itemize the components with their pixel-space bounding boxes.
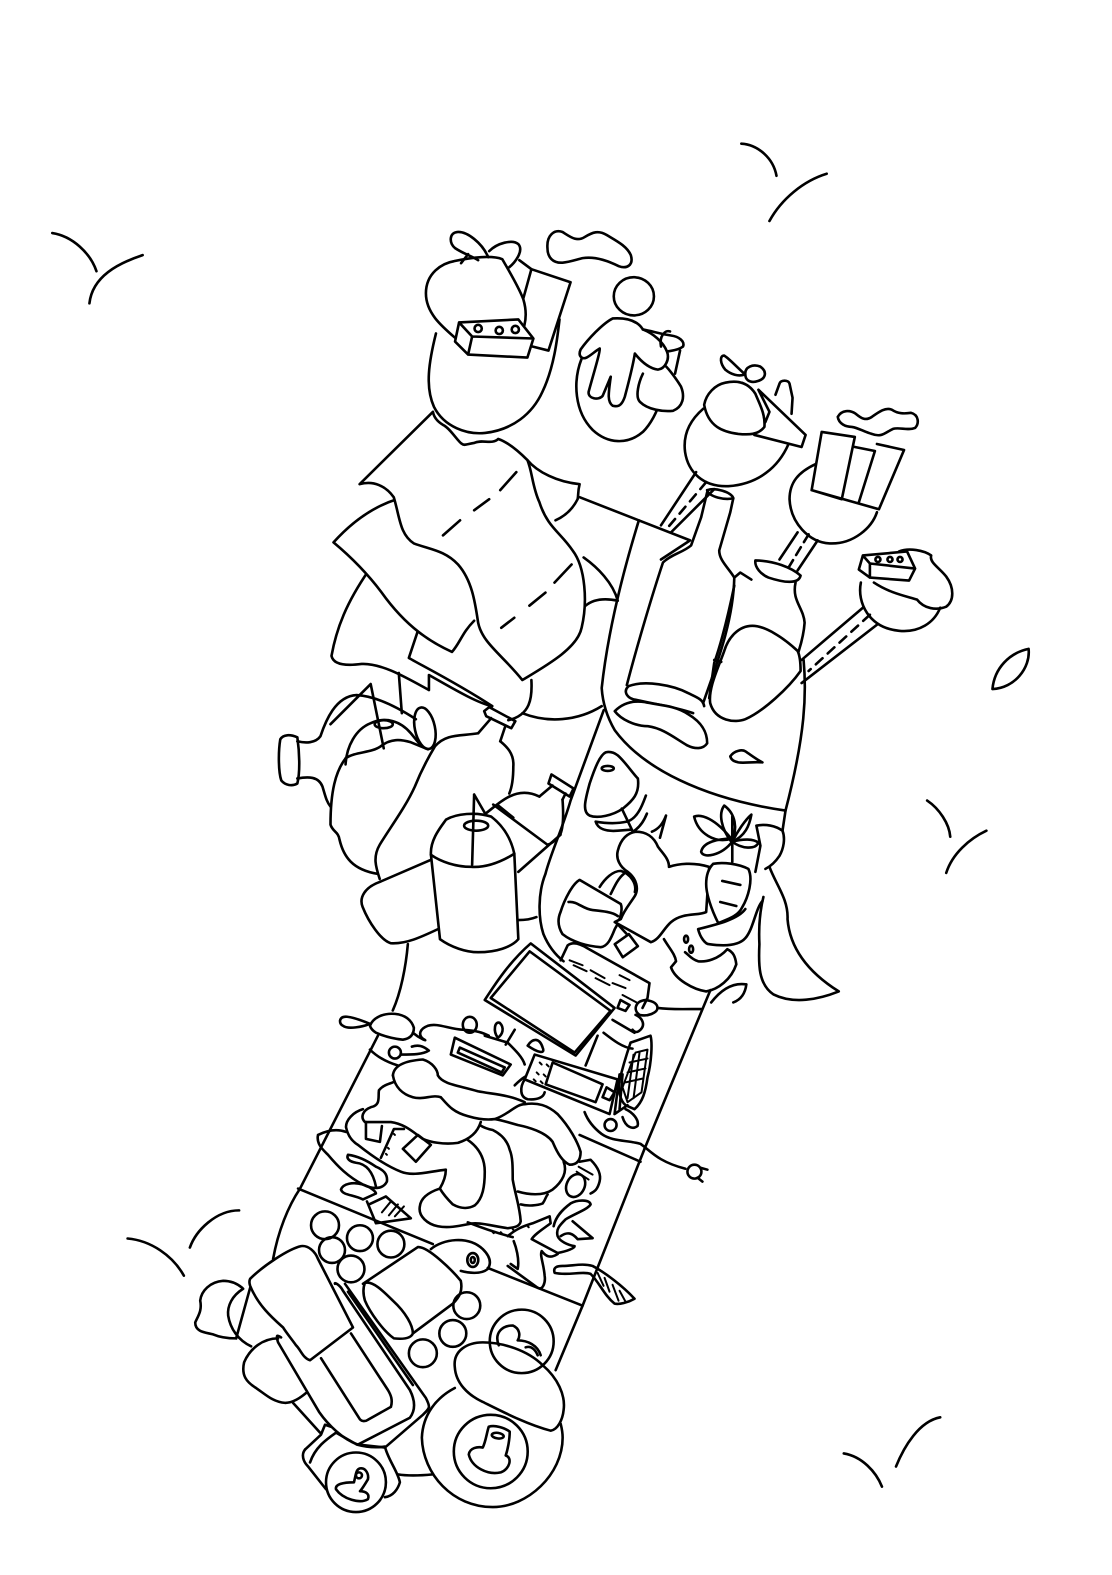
lollipop: brick and road [802,550,952,683]
head with brick [426,232,571,433]
discarded clothes [318,1060,581,1228]
cloud top [547,231,632,267]
large can [422,1342,564,1507]
lollipop: propeller and roof [661,356,806,532]
computer: monitor, keyboard, device [451,943,710,1149]
lollipop: three blocks and smoke [779,409,918,571]
long container and gift blob [249,1246,429,1448]
scattered tin lids [311,1211,480,1367]
fish shape [431,1240,490,1273]
small can [303,1425,400,1512]
glass bottles on the body [602,489,805,831]
right-hand squiggles and strap [468,1160,635,1304]
food waste: mushroom, core, bag, carrot, hair [540,710,839,1002]
cylinder box [363,1247,461,1339]
mouse and cables [340,1014,707,1182]
ring pull disc [490,1310,554,1373]
body outline lower section [273,1036,645,1475]
left stones [195,1281,306,1403]
plastic bottles and trash can [279,684,574,1010]
torn paper and folded layers [332,412,690,720]
lower figure: electronics, clothes and cans [195,943,710,1512]
person figure [576,277,683,441]
decorative leaves around the figure [52,144,1029,1487]
